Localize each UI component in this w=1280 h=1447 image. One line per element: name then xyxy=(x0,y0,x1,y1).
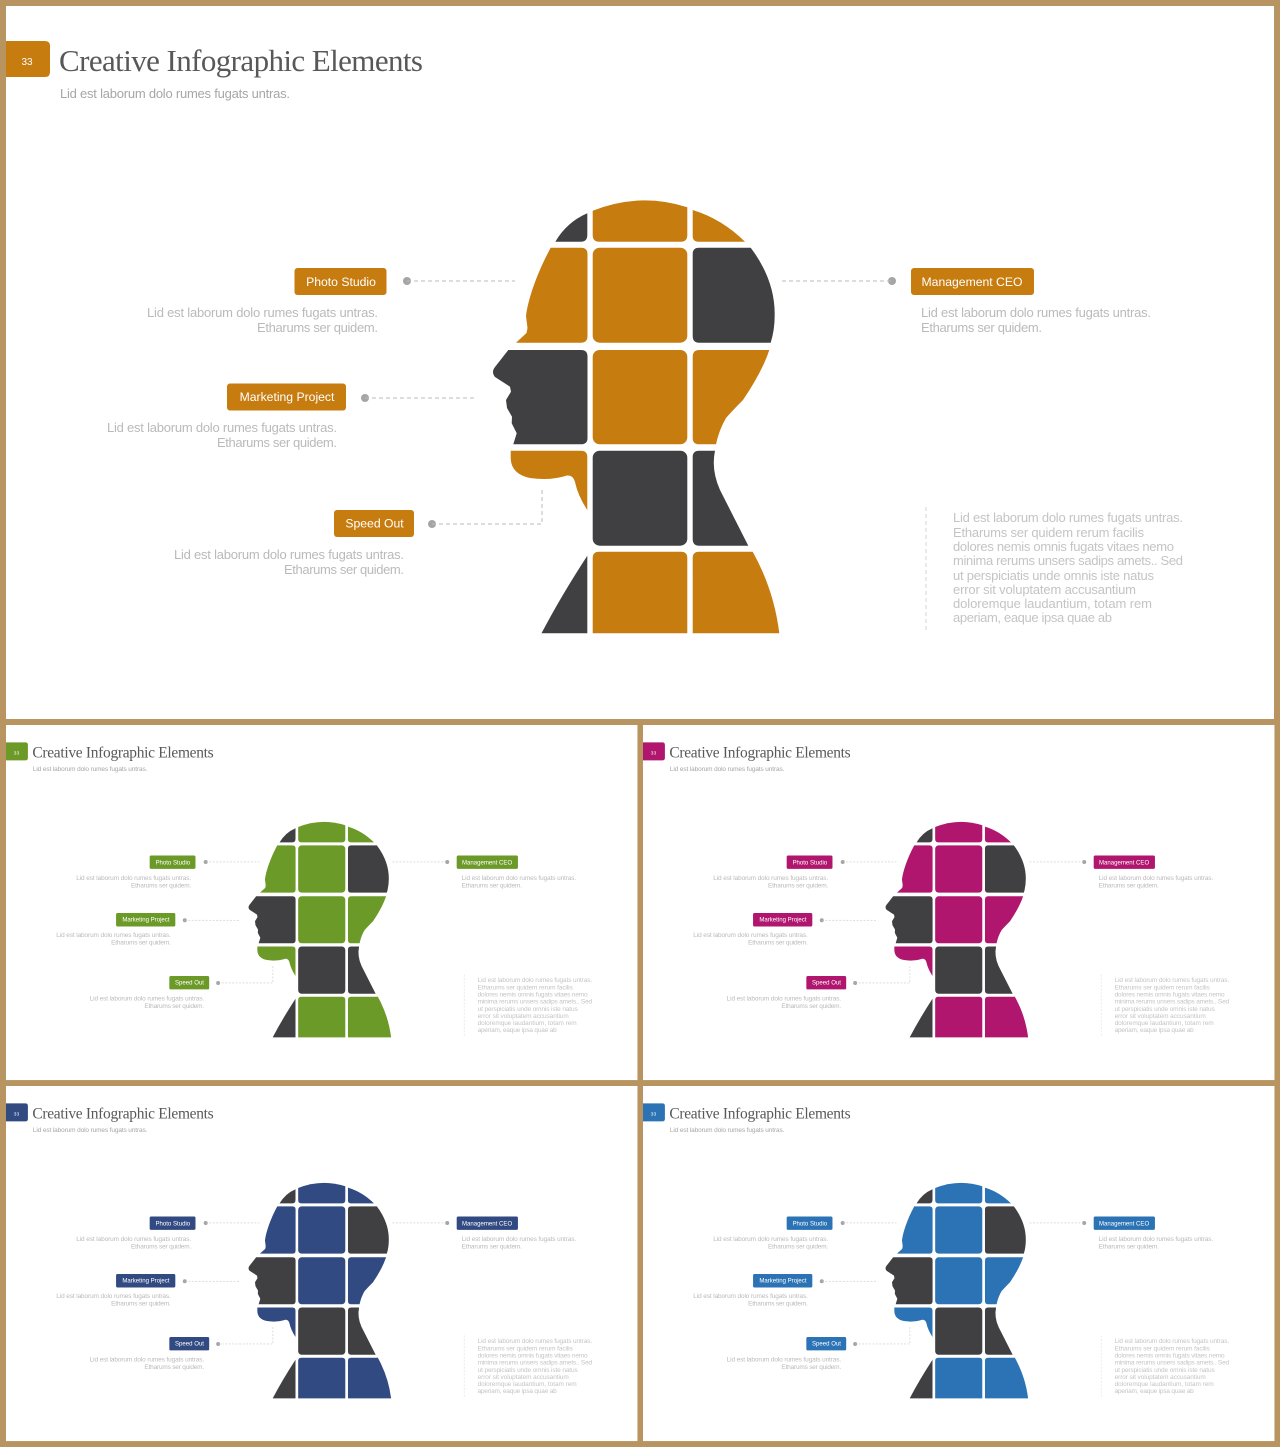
text: Speed Out description: Lid est laborum dolo rumes fugats untras. xyxy=(174,547,404,562)
label: Management CEO: Management CEO xyxy=(1099,1221,1149,1227)
label: Management CEO: Management CEO xyxy=(1099,860,1149,866)
paragraph with dashed rule: dolores nemis omnis fugats vitaes nemo xyxy=(478,1352,588,1359)
title: Creative Infographic Elements xyxy=(32,744,214,761)
label: Management CEO xyxy=(1094,855,1155,869)
page number badge: 33 xyxy=(651,1111,656,1117)
text: Photo Studio description: Etharums ser quidem. xyxy=(131,882,191,889)
label: Management CEO xyxy=(911,268,1034,295)
text: Marketing Project description: Etharums ser quidem. xyxy=(217,435,337,450)
text: Photo Studio description xyxy=(76,1236,191,1250)
paragraph with dashed rule xyxy=(1101,974,1230,1036)
head silhouette grid xyxy=(249,822,391,1037)
head silhouette grid xyxy=(886,822,1028,1037)
label: Photo Studio xyxy=(787,1216,832,1230)
paragraph with dashed rule xyxy=(464,974,593,1036)
text: Speed Out description: Etharums ser quidem. xyxy=(781,1364,841,1371)
connector: Photo Studio xyxy=(204,860,259,864)
paragraph with dashed rule: Lid est laborum dolo rumes fugats untras. xyxy=(478,977,592,984)
text: Speed Out description xyxy=(727,1356,841,1371)
paragraph with dashed rule: Etharums ser quidem rerum facilis xyxy=(478,1345,573,1352)
label: Speed Out: Speed Out xyxy=(812,1342,841,1348)
text: Photo Studio description xyxy=(713,875,828,889)
paragraph with dashed rule: ut perspiciatis unde omnis iste natus xyxy=(1115,1006,1215,1013)
paragraph with dashed rule: dolores nemis omnis fugats vitaes nemo xyxy=(478,991,588,998)
paragraph with dashed rule: minima rerums unsers sadips amets.. Sed xyxy=(478,1359,593,1366)
text: Photo Studio description: Etharums ser quidem. xyxy=(768,882,828,889)
text: Management CEO description: Lid est laborum dolo rumes fugats untras. xyxy=(1099,1236,1213,1243)
text: Management CEO description xyxy=(462,1236,576,1250)
label: Marketing Project: Marketing Project xyxy=(122,1279,170,1285)
text: Speed Out description: Etharums ser quidem. xyxy=(284,562,404,577)
label: Management CEO xyxy=(1094,1216,1155,1230)
paragraph with dashed rule: Lid est laborum dolo rumes fugats untras. xyxy=(478,1338,592,1345)
page number badge xyxy=(6,742,28,760)
text: Marketing Project description: Lid est laborum dolo rumes fugats untras. xyxy=(693,932,808,939)
label: Speed Out xyxy=(806,1337,846,1350)
connector: Speed Out xyxy=(428,487,542,528)
text: Marketing Project description: Lid est laborum dolo rumes fugats untras. xyxy=(56,932,171,939)
label: Speed Out: Speed Out xyxy=(175,1342,204,1348)
paragraph with dashed rule: aperiam, eaque ipsa quae ab xyxy=(953,610,1112,625)
label: Marketing Project xyxy=(116,1274,175,1287)
text: Photo Studio description xyxy=(713,1236,828,1250)
paragraph with dashed rule: minima rerums unsers sadips amets.. Sed xyxy=(1115,1359,1230,1366)
paragraph with dashed rule: aperiam, eaque ipsa quae ab xyxy=(478,1027,557,1034)
subtitle: Lid est laborum dolo rumes fugats untras. xyxy=(33,1127,148,1134)
connector: Photo Studio xyxy=(204,1221,259,1225)
label: Marketing Project xyxy=(753,1274,812,1287)
subtitle: Lid est laborum dolo rumes fugats untras. xyxy=(33,766,148,773)
connector: Management CEO xyxy=(782,277,896,285)
paragraph with dashed rule: ut perspiciatis unde omnis iste natus xyxy=(478,1006,578,1013)
text: Speed Out description: Etharums ser quidem. xyxy=(144,1003,204,1010)
paragraph with dashed rule: dolores nemis omnis fugats vitaes nemo xyxy=(953,539,1174,554)
label: Marketing Project: Marketing Project xyxy=(122,918,170,924)
paragraph with dashed rule xyxy=(1101,1335,1230,1397)
paragraph with dashed rule: doloremque laudantium, totam rem xyxy=(1115,1020,1214,1027)
paragraph with dashed rule: aperiam, eaque ipsa quae ab xyxy=(478,1388,557,1395)
text: Management CEO description: Etharums ser quidem. xyxy=(1099,1243,1159,1250)
text: Photo Studio description: Lid est laborum dolo rumes fugats untras. xyxy=(76,875,191,882)
text: Photo Studio description: Lid est laborum dolo rumes fugats untras. xyxy=(713,1236,828,1243)
connector: Photo Studio xyxy=(841,860,896,864)
text: Speed Out description xyxy=(727,995,841,1010)
text: Management CEO description: Lid est laborum dolo rumes fugats untras. xyxy=(921,305,1151,320)
text: Speed Out description: Etharums ser quidem. xyxy=(144,1364,204,1371)
slide: orange (large) xyxy=(6,6,1274,719)
label: Marketing Project: Marketing Project xyxy=(759,918,807,924)
paragraph with dashed rule: ut perspiciatis unde omnis iste natus xyxy=(1115,1367,1215,1374)
text: Marketing Project description: Etharums ser quidem. xyxy=(748,940,808,947)
label: Photo Studio xyxy=(150,1216,195,1230)
text: Management CEO description: Etharums ser quidem. xyxy=(921,320,1042,335)
text: Photo Studio description: Etharums ser quidem. xyxy=(131,1243,191,1250)
connector: Marketing Project xyxy=(183,1279,239,1283)
paragraph with dashed rule: minima rerums unsers sadips amets.. Sed xyxy=(953,553,1183,568)
page number badge: 33 xyxy=(14,750,19,756)
page number badge xyxy=(6,1103,28,1121)
paragraph with dashed rule: Etharums ser quidem rerum facilis xyxy=(478,984,573,991)
paragraph with dashed rule: error sit voluptatem accusantium xyxy=(1115,1374,1206,1381)
head silhouette grid xyxy=(249,1183,391,1398)
label: Speed Out xyxy=(169,976,209,989)
text: Speed Out description: Lid est laborum dolo rumes fugats untras. xyxy=(90,995,204,1002)
page number badge xyxy=(6,41,50,77)
text: Management CEO description: Lid est laborum dolo rumes fugats untras. xyxy=(462,875,576,882)
text: Marketing Project description xyxy=(693,1293,808,1308)
text: Speed Out description: Lid est laborum dolo rumes fugats untras. xyxy=(727,1356,841,1363)
text: Photo Studio description xyxy=(147,305,378,335)
text: Management CEO description: Lid est laborum dolo rumes fugats untras. xyxy=(1099,875,1213,882)
text: Photo Studio description xyxy=(76,875,191,889)
text: Speed Out description xyxy=(90,995,204,1010)
text: Speed Out description: Lid est laborum dolo rumes fugats untras. xyxy=(727,995,841,1002)
paragraph with dashed rule: doloremque laudantium, totam rem xyxy=(478,1381,577,1388)
text: Marketing Project description xyxy=(693,932,808,947)
connector: Management CEO xyxy=(1029,860,1086,864)
label: Photo Studio: Photo Studio xyxy=(306,275,376,289)
label: Photo Studio: Photo Studio xyxy=(792,860,828,866)
title: Creative Infographic Elements xyxy=(669,744,851,761)
paragraph with dashed rule: aperiam, eaque ipsa quae ab xyxy=(1115,1027,1194,1034)
text: Management CEO description: Etharums ser quidem. xyxy=(462,1243,522,1250)
slide: green xyxy=(6,725,637,1080)
label: Speed Out xyxy=(806,976,846,989)
text: Management CEO description xyxy=(921,305,1151,335)
label: Photo Studio xyxy=(150,855,195,869)
label: Management CEO xyxy=(457,855,518,869)
paragraph with dashed rule: error sit voluptatem accusantium xyxy=(953,582,1136,597)
connector: Marketing Project xyxy=(820,1279,876,1283)
subtitle: Lid est laborum dolo rumes fugats untras. xyxy=(60,86,290,101)
text: Marketing Project description: Lid est laborum dolo rumes fugats untras. xyxy=(56,1293,171,1300)
text: Management CEO description: Lid est laborum dolo rumes fugats untras. xyxy=(462,1236,576,1243)
paragraph with dashed rule: ut perspiciatis unde omnis iste natus xyxy=(478,1367,578,1374)
page number badge xyxy=(643,742,665,760)
text: Management CEO description: Etharums ser quidem. xyxy=(462,882,522,889)
label: Marketing Project xyxy=(227,384,346,410)
label: Management CEO: Management CEO xyxy=(462,860,512,866)
text: Marketing Project description: Etharums ser quidem. xyxy=(111,1301,171,1308)
connector: Marketing Project xyxy=(361,394,474,402)
paragraph with dashed rule: doloremque laudantium, totam rem xyxy=(953,596,1152,611)
label: Marketing Project: Marketing Project xyxy=(240,390,335,404)
slide: blue xyxy=(643,1086,1274,1441)
text: Marketing Project description: Etharums ser quidem. xyxy=(748,1301,808,1308)
paragraph with dashed rule: Lid est laborum dolo rumes fugats untras. xyxy=(1115,977,1229,984)
connector: Photo Studio xyxy=(841,1221,896,1225)
page number badge: 33 xyxy=(14,1111,19,1117)
label: Speed Out xyxy=(334,510,414,537)
page number badge: 33 xyxy=(21,57,33,68)
paragraph with dashed rule xyxy=(464,1335,593,1397)
label: Speed Out: Speed Out xyxy=(175,981,204,987)
paragraph with dashed rule: minima rerums unsers sadips amets.. Sed xyxy=(478,998,593,1005)
text: Photo Studio description: Etharums ser quidem. xyxy=(257,320,378,335)
label: Speed Out: Speed Out xyxy=(345,516,404,530)
text: Speed Out description xyxy=(174,547,404,577)
connector: Speed Out xyxy=(853,965,910,985)
paragraph with dashed rule: dolores nemis omnis fugats vitaes nemo xyxy=(1115,991,1225,998)
label: Photo Studio: Photo Studio xyxy=(792,1221,828,1227)
connector: Management CEO xyxy=(392,860,449,864)
connector: Marketing Project xyxy=(183,918,239,922)
paragraph with dashed rule: error sit voluptatem accusantium xyxy=(478,1374,569,1381)
text: Photo Studio description: Etharums ser quidem. xyxy=(768,1243,828,1250)
text: Speed Out description: Lid est laborum dolo rumes fugats untras. xyxy=(90,1356,204,1363)
paragraph with dashed rule: error sit voluptatem accusantium xyxy=(1115,1013,1206,1020)
paragraph with dashed rule: ut perspiciatis unde omnis iste natus xyxy=(953,568,1154,583)
subtitle: Lid est laborum dolo rumes fugats untras. xyxy=(670,766,785,773)
title: Creative Infographic Elements xyxy=(669,1105,851,1122)
paragraph with dashed rule: Etharums ser quidem rerum facilis xyxy=(1115,1345,1210,1352)
connector: Management CEO xyxy=(1029,1221,1086,1225)
text: Management CEO description xyxy=(1099,1236,1213,1250)
slide: navy xyxy=(6,1086,637,1441)
connector: Marketing Project xyxy=(820,918,876,922)
text: Marketing Project description: Lid est laborum dolo rumes fugats untras. xyxy=(693,1293,808,1300)
paragraph with dashed rule: aperiam, eaque ipsa quae ab xyxy=(1115,1388,1194,1395)
paragraph with dashed rule: dolores nemis omnis fugats vitaes nemo xyxy=(1115,1352,1225,1359)
title: Creative Infographic Elements xyxy=(32,1105,214,1122)
label: Management CEO xyxy=(457,1216,518,1230)
paragraph with dashed rule: error sit voluptatem accusantium xyxy=(478,1013,569,1020)
connector: Photo Studio xyxy=(403,277,515,285)
label: Photo Studio: Photo Studio xyxy=(155,1221,191,1227)
text: Marketing Project description: Etharums ser quidem. xyxy=(111,940,171,947)
label: Photo Studio xyxy=(787,855,832,869)
text: Marketing Project description xyxy=(107,420,337,450)
paragraph with dashed rule: minima rerums unsers sadips amets.. Sed xyxy=(1115,998,1230,1005)
text: Marketing Project description xyxy=(56,932,171,947)
subtitle: Lid est laborum dolo rumes fugats untras. xyxy=(670,1127,785,1134)
text: Photo Studio description: Lid est laborum dolo rumes fugats untras. xyxy=(76,1236,191,1243)
page number badge: 33 xyxy=(651,750,656,756)
text: Speed Out description: Etharums ser quidem. xyxy=(781,1003,841,1010)
connector: Management CEO xyxy=(392,1221,449,1225)
label: Marketing Project: Marketing Project xyxy=(759,1279,807,1285)
paragraph with dashed rule: doloremque laudantium, totam rem xyxy=(478,1020,577,1027)
connector: Speed Out xyxy=(853,1326,910,1346)
label: Photo Studio: Photo Studio xyxy=(155,860,191,866)
text: Management CEO description xyxy=(462,875,576,889)
label: Marketing Project xyxy=(116,913,175,926)
title: Creative Infographic Elements xyxy=(59,43,423,78)
text: Speed Out description xyxy=(90,1356,204,1371)
paragraph with dashed rule: doloremque laudantium, totam rem xyxy=(1115,1381,1214,1388)
label: Speed Out xyxy=(169,1337,209,1350)
paragraph with dashed rule: Etharums ser quidem rerum facilis xyxy=(1115,984,1210,991)
head silhouette grid xyxy=(493,200,779,633)
label: Photo Studio xyxy=(294,268,386,295)
head silhouette grid xyxy=(886,1183,1028,1398)
connector: Speed Out xyxy=(216,965,273,985)
page number badge xyxy=(643,1103,665,1121)
text: Photo Studio description: Lid est laborum dolo rumes fugats untras. xyxy=(147,305,378,320)
text: Management CEO description xyxy=(1099,875,1213,889)
paragraph with dashed rule: Lid est laborum dolo rumes fugats untras. xyxy=(953,510,1183,525)
label: Marketing Project xyxy=(753,913,812,926)
text: Marketing Project description xyxy=(56,1293,171,1308)
label: Management CEO: Management CEO xyxy=(922,275,1022,289)
paragraph with dashed rule xyxy=(926,507,1183,630)
paragraph with dashed rule: Lid est laborum dolo rumes fugats untras. xyxy=(1115,1338,1229,1345)
slide: magenta xyxy=(643,725,1274,1080)
text: Photo Studio description: Lid est laborum dolo rumes fugats untras. xyxy=(713,875,828,882)
connector: Speed Out xyxy=(216,1326,273,1346)
label: Speed Out: Speed Out xyxy=(812,981,841,987)
label: Management CEO: Management CEO xyxy=(462,1221,512,1227)
text: Management CEO description: Etharums ser quidem. xyxy=(1099,882,1159,889)
paragraph with dashed rule: Etharums ser quidem rerum facilis xyxy=(953,525,1144,540)
text: Marketing Project description: Lid est laborum dolo rumes fugats untras. xyxy=(107,420,337,435)
